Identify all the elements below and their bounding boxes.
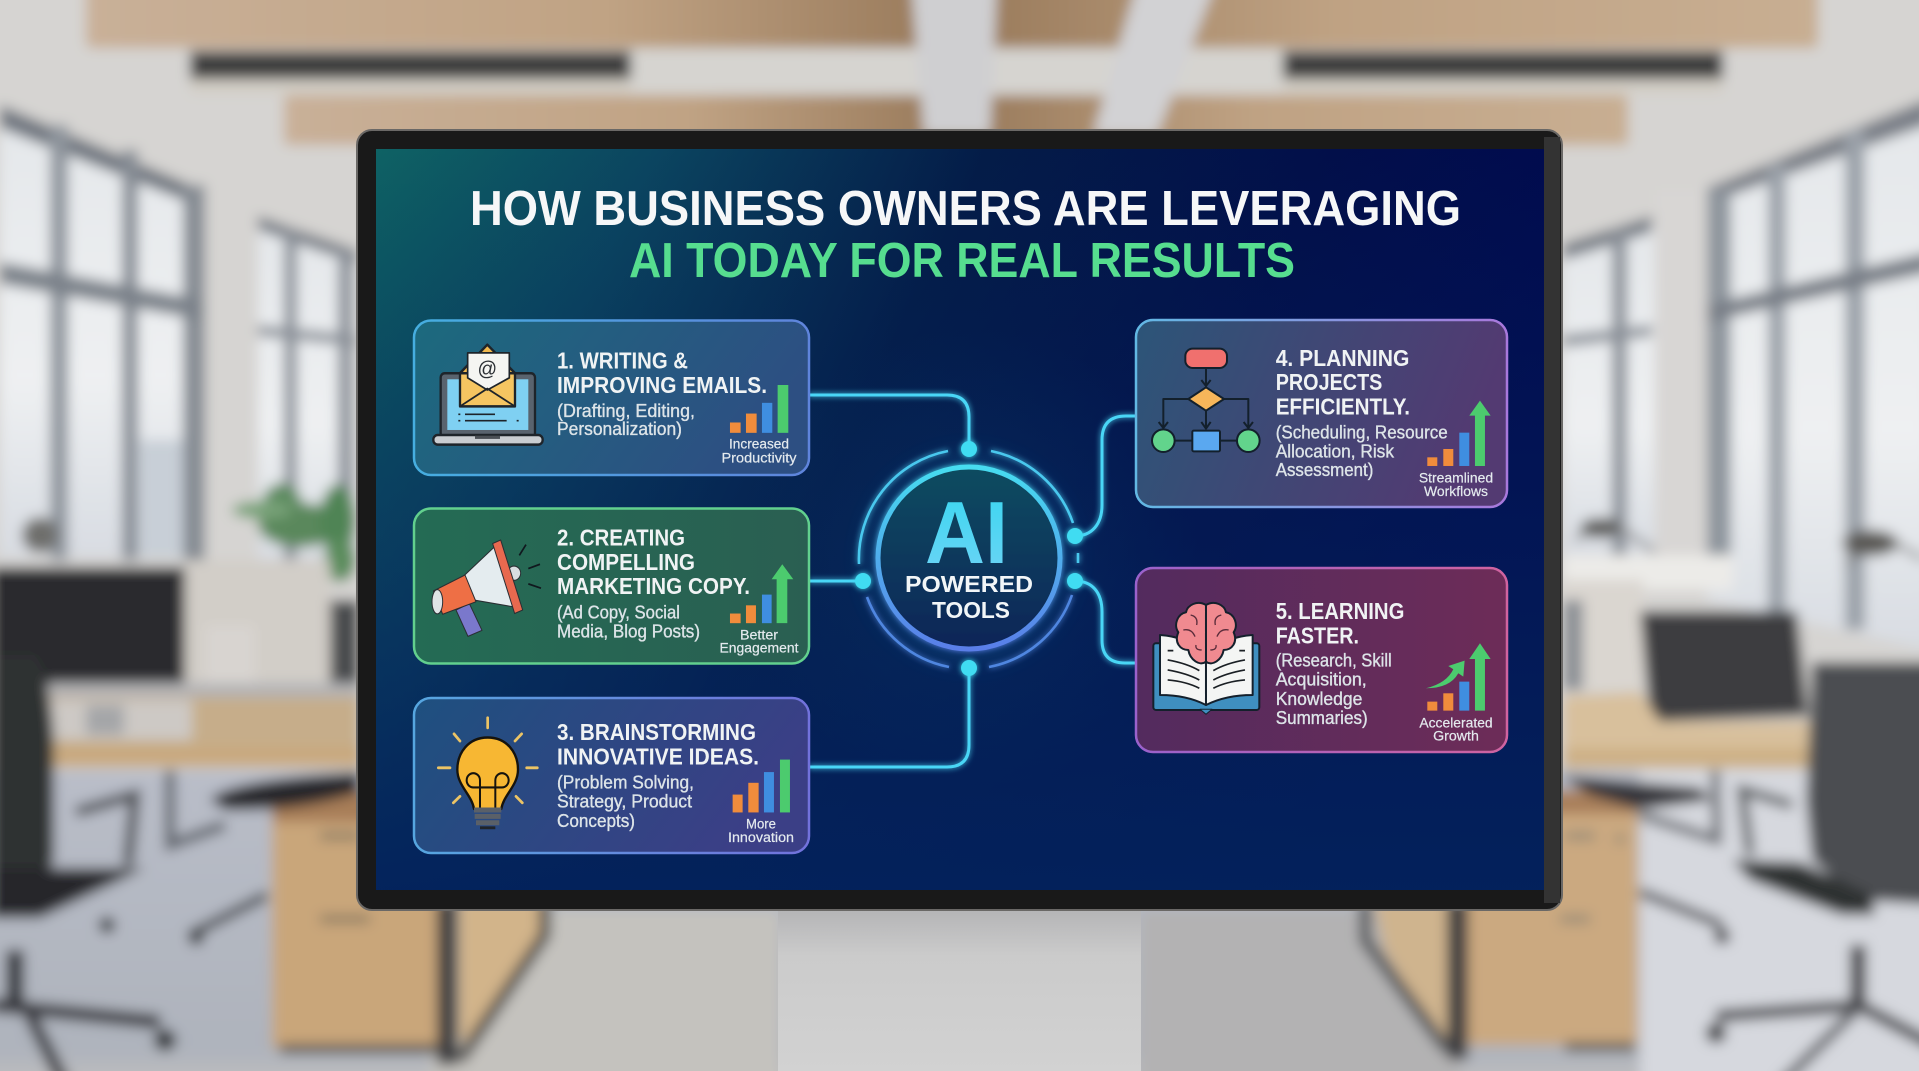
text: (Ad Copy, Social [557,603,680,623]
text: 1. WRITING & [557,348,688,374]
text: Allocation, Risk [1276,441,1395,461]
panel: 3 brainstorming [414,698,809,853]
panel: 4 planning projects [1136,320,1507,507]
panel: 1 writing emails [414,320,809,475]
result label [1419,471,1493,499]
mini bar chart [733,760,790,812]
result label [728,817,794,845]
text: 2. CREATING [557,525,685,551]
text: PROJECTS [1276,369,1382,395]
result label: Innovation [728,830,794,845]
text: (Scheduling, Resource [1276,422,1448,442]
text: (Drafting, Editing, [557,401,695,421]
title: HOW BUSINESS OWNERS ARE LEVERAGING [470,182,1461,236]
monitor: display with bezel [357,130,1562,910]
result label: Better [740,627,779,642]
text: Summaries) [1276,708,1368,728]
connection nodes [855,441,1083,676]
monitor stand [778,905,1141,1071]
text [557,525,750,642]
title: AI TODAY FOR REAL RESULTS [629,234,1295,288]
hub label: POWERED [905,571,1033,597]
text: 3. BRAINSTORMING [557,719,756,745]
text: INNOVATIVE IDEAS. [557,743,759,769]
outer ring arcs [859,451,1078,667]
inner ring [878,467,1060,649]
result label: Engagement [720,640,799,656]
panel: 5 learning faster [1136,568,1507,752]
text [1276,598,1404,728]
hub label: AI [925,483,1008,582]
result label [720,627,799,656]
result label [1419,715,1493,744]
panel: 2 marketing copy [414,508,809,664]
hub label: TOOLS [932,597,1010,623]
result label: Streamlined [1419,471,1493,486]
text: Assessment) [1276,460,1373,480]
connector lines [809,395,1136,767]
text: MARKETING COPY. [557,573,750,599]
result label: Workflows [1424,484,1488,499]
icon: laptop with email [433,345,543,445]
result label: Increased [729,437,789,452]
text: IMPROVING EMAILS. [557,372,767,398]
result label: Growth [1433,729,1479,744]
text: Acquisition, [1276,670,1367,690]
text: COMPELLING [557,549,695,575]
icon: brain on open book [1153,603,1259,714]
text: Knowledge [1276,689,1362,709]
text: EFFICIENTLY. [1276,393,1410,419]
text: FASTER. [1276,622,1359,648]
hub label [905,483,1033,623]
result label: Accelerated [1419,715,1493,730]
text: Concepts) [557,811,635,831]
text: Strategy, Product [557,792,692,812]
title [470,182,1461,288]
text: Media, Blog Posts) [557,622,700,642]
text [557,719,759,831]
text: (Problem Solving, [557,773,694,793]
text: 5. LEARNING [1276,598,1404,624]
text: Personalization) [557,419,682,439]
mini bar chart with arrow [730,564,793,623]
result label: More [746,817,776,832]
mini bar chart with arrows [1426,643,1491,711]
text [1276,345,1448,480]
text: (Research, Skill [1276,651,1392,671]
icon: megaphone [432,540,541,636]
icon: flowchart [1152,349,1260,452]
text: 4. PLANNING [1276,345,1409,371]
mini bar chart with arrow [1427,401,1491,466]
central AI hub [855,441,1083,676]
text [557,348,767,439]
result label [722,437,797,466]
icon: laptop with email: @ [478,358,497,381]
result label: Productivity [722,450,797,466]
icon: light bulb [438,718,537,828]
mini bar chart [730,385,788,433]
